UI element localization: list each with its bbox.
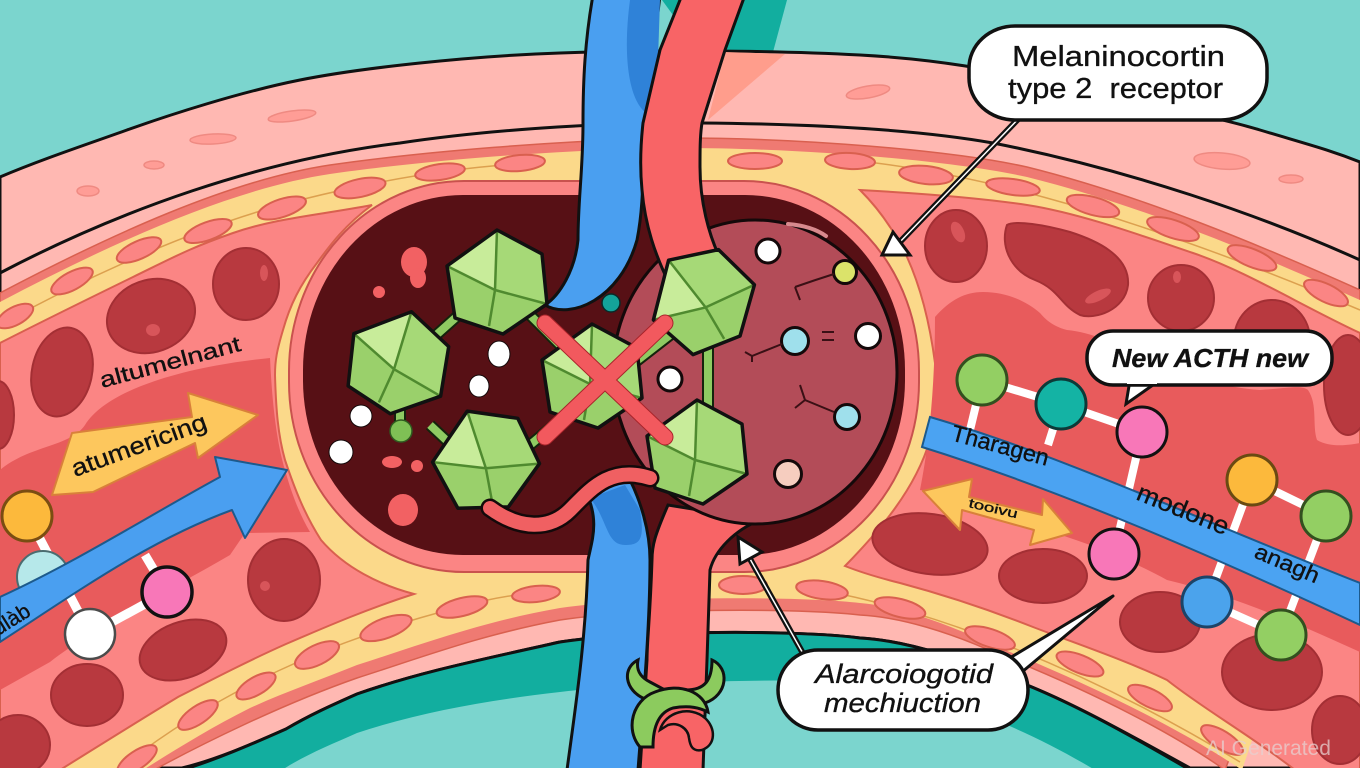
panel: right red tissue xyxy=(845,190,1360,768)
wall inner line xyxy=(0,123,1360,273)
panel: light teal lumen xyxy=(282,680,1095,768)
arrow: yellow double xyxy=(923,479,1072,545)
green clamp xyxy=(627,660,724,750)
panel: dark inner tissue right xyxy=(920,292,1360,652)
callout: mechanism xyxy=(738,537,1113,730)
highlight on cell xyxy=(788,224,826,236)
molecule left xyxy=(2,491,167,634)
red particles xyxy=(373,247,427,526)
callout: melanocortin receptor: Melaninocortin xyxy=(1012,41,1225,73)
ribbon: blue hormone: anagh xyxy=(1251,539,1323,588)
callout: mechanism: Alarcoiogotid xyxy=(813,659,994,689)
callout: melanocortin receptor: type 2 receptor xyxy=(1008,73,1223,105)
vessel: red lower xyxy=(640,505,760,768)
vessel: blue upper xyxy=(545,0,660,310)
arrow: blue long xyxy=(0,457,287,642)
molecule right bonds xyxy=(970,380,1326,635)
red blood cells xyxy=(0,210,1360,768)
receptor stalks xyxy=(745,274,834,412)
callout: mechanism: mechiuction xyxy=(824,688,981,718)
arrow: yellow double: tooivu xyxy=(967,495,1019,521)
ribbon: blue hormone: modone xyxy=(1133,479,1233,541)
outer wall small cells xyxy=(77,82,1303,196)
white particles xyxy=(329,341,510,464)
molecule right nodes xyxy=(957,355,1351,660)
arrow: yellow atumericing xyxy=(52,393,258,495)
panel: receptor cell xyxy=(613,220,897,524)
vessel: blue lower shade xyxy=(590,485,642,545)
bonds between hexagons xyxy=(400,310,708,455)
callout: new ACTH xyxy=(1087,331,1332,404)
callout: melanocortin receptor xyxy=(882,26,1267,255)
wall shadow wedge xyxy=(708,52,785,120)
vessel: red upper xyxy=(641,0,745,285)
hexagon: ACTH complex xyxy=(336,228,774,526)
dark lumen xyxy=(303,195,905,555)
vessel: blue upper shade xyxy=(627,0,660,112)
inhibition cross xyxy=(545,323,665,437)
yellow band cells xyxy=(0,152,1352,768)
callout: new ACTH: New ACTH new xyxy=(1112,343,1310,373)
small green node xyxy=(390,420,412,442)
ribbon: blue hormone: Tharagen xyxy=(949,420,1052,471)
vessel: blue lower xyxy=(567,480,650,768)
panel: dark teal lumen xyxy=(182,632,1190,768)
receptor cell molecules xyxy=(658,239,880,488)
panel: central lumen wall xyxy=(289,181,919,572)
panel: left red tissue xyxy=(0,205,414,768)
ribbon: blue hormone xyxy=(922,417,1360,625)
watermark: AI Generated xyxy=(1206,737,1331,760)
panel: dark inner tissue left xyxy=(0,358,310,690)
small teal dot xyxy=(602,294,620,312)
teal vessel backdrop xyxy=(662,0,787,52)
nodes left lower xyxy=(65,567,192,659)
red curl xyxy=(490,474,650,525)
label: altumelnant: altumelnant xyxy=(97,331,243,393)
cell highlights xyxy=(146,219,1181,591)
band connecting lines xyxy=(0,160,1360,768)
pink ring xyxy=(289,181,919,572)
arrow: yellow atumericing: atumericing xyxy=(68,409,210,483)
